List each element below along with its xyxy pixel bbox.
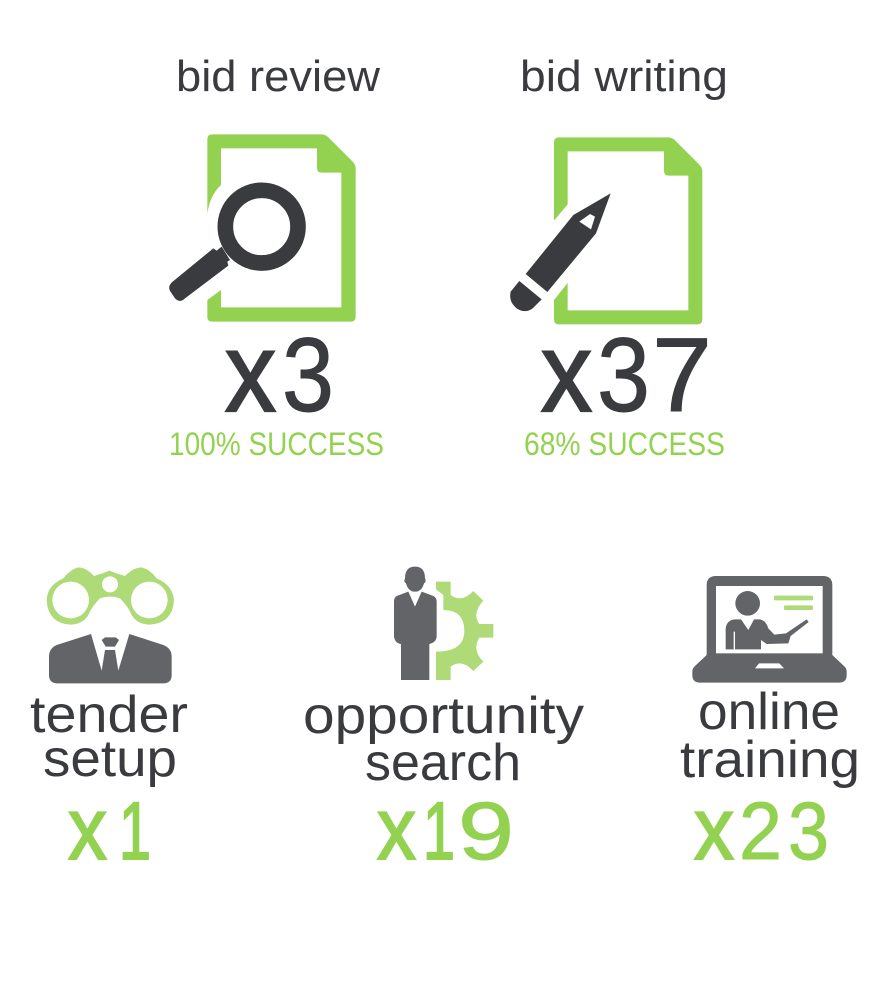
count: x23: 2 xyxy=(739,786,782,877)
label: online training: online xyxy=(698,683,840,741)
icon: person with gear xyxy=(394,567,493,680)
count: x3 xyxy=(225,310,334,435)
icon: laptop with presenter xyxy=(692,576,847,683)
icon: document with pencil xyxy=(510,137,702,324)
heading: bid writing: bid writing xyxy=(520,52,728,101)
label: online training: training xyxy=(680,731,860,789)
count: x37: 3 xyxy=(597,317,650,434)
count: x37: 7 xyxy=(652,317,712,434)
panel: bid writing xyxy=(510,52,728,462)
count: x23 xyxy=(694,779,829,878)
count: x1: x xyxy=(68,779,107,878)
icon: document with magnifying glass xyxy=(163,134,356,322)
count: x1 xyxy=(68,779,151,878)
count: x37 xyxy=(541,310,712,435)
label: opportunity search: search xyxy=(365,734,521,792)
count: x23: 3 xyxy=(788,786,829,877)
success rate: 68%: 68% SUCCESS xyxy=(524,426,725,462)
panel: tender setup xyxy=(30,567,188,878)
label: tender setup: tender xyxy=(30,686,188,744)
count: x19: 9 xyxy=(458,786,514,877)
count: x3: 3 xyxy=(282,317,334,434)
count: x19 xyxy=(377,779,514,878)
panel: online training xyxy=(680,576,860,878)
label: online training xyxy=(680,683,860,789)
label: tender setup: setup xyxy=(43,730,177,788)
count: x37: x xyxy=(541,310,592,435)
count: x1: 1 xyxy=(119,786,151,877)
count: x3: x xyxy=(225,310,276,435)
panel: opportunity search xyxy=(303,567,584,878)
panel: bid review xyxy=(163,52,384,462)
label: tender setup xyxy=(30,686,188,788)
label: opportunity search xyxy=(303,687,584,792)
count: x23: x xyxy=(694,779,734,878)
count: x19: x xyxy=(377,779,416,878)
count: x19: 1 xyxy=(423,786,455,877)
heading: bid review: bid review xyxy=(176,52,380,101)
success rate: 100%: 100% SUCCESS xyxy=(169,426,384,462)
icon: suited figure with binoculars xyxy=(47,567,174,683)
label: opportunity search: opportunity xyxy=(303,687,584,745)
